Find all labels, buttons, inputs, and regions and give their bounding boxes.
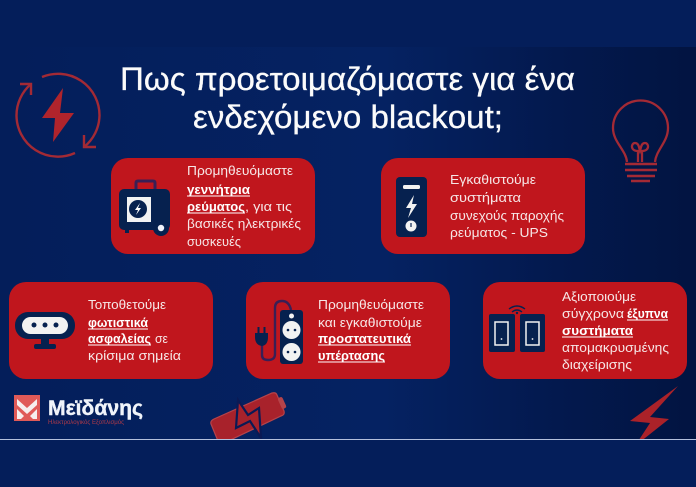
- icon: smart devices: [489, 306, 545, 352]
- logo mark: [14, 395, 40, 421]
- icon: generator: [119, 181, 170, 236]
- card text: [318, 297, 424, 363]
- title: Πως προετοιμαζόμαστε για ένα: [120, 61, 575, 97]
- logo name: Μεϊδάνης: [48, 397, 143, 420]
- card text: και εγκαθιστούμε: [318, 315, 422, 330]
- icon: safety light: [15, 312, 75, 349]
- card text: ρεύματος: [187, 200, 245, 214]
- icon: UPS unit: [396, 177, 427, 237]
- card text: ασφαλείας: [88, 332, 151, 346]
- card text: συστήματα: [450, 190, 522, 205]
- panel: generator: [111, 158, 315, 254]
- panel: surge protectors: [246, 282, 450, 379]
- panel: safety lights: [9, 282, 213, 379]
- panel: smart systems: [483, 282, 687, 379]
- card text: συνεχούς παροχής: [450, 208, 564, 223]
- card text: βασικές ηλεκτρικές: [187, 216, 301, 231]
- card text: γεννήτρια: [187, 183, 250, 197]
- card text: , για τις: [245, 199, 292, 214]
- card text: διαχείρισης: [562, 357, 632, 372]
- logo tagline: Ηλεκτρολογικός Εξοπλισμός: [48, 418, 124, 426]
- card text: Αξιοποιούμε: [562, 289, 636, 304]
- icon: power cycle bolt: [16, 74, 100, 157]
- card text: σε: [155, 331, 168, 346]
- card text: ρεύματος - UPS: [450, 225, 548, 240]
- card text: συσκευές: [187, 234, 241, 249]
- icon: power strip: [255, 301, 303, 364]
- card text: συστήματα: [562, 324, 633, 338]
- card text: [562, 289, 669, 372]
- card text: σύγχρονα: [562, 306, 625, 321]
- icon: light bulb: [613, 100, 668, 181]
- card text: φωτιστικά: [88, 316, 148, 330]
- card text: έξυπνα: [627, 307, 668, 321]
- card text: κρίσιμα σημεία: [88, 348, 182, 363]
- panel: UPS: [381, 158, 585, 254]
- card text: απομακρυσμένης: [562, 340, 669, 355]
- title: ενδεχόμενο blackout;: [193, 99, 503, 135]
- card text: [187, 163, 301, 249]
- card text: Προμηθευόμαστε: [187, 163, 293, 178]
- card text: Προμηθευόμαστε: [318, 297, 424, 312]
- card text: υπέρτασης: [318, 349, 385, 363]
- icon: lightning bolt: [630, 386, 678, 439]
- card text: [450, 172, 564, 240]
- card text: [88, 297, 182, 363]
- title: [120, 61, 575, 135]
- card text: Τοποθετούμε: [88, 297, 166, 312]
- icon: battery bolt: [211, 393, 287, 443]
- card text: Εγκαθιστούμε: [450, 172, 536, 187]
- card text: προστατευτικά: [318, 332, 411, 346]
- logo: [14, 395, 143, 426]
